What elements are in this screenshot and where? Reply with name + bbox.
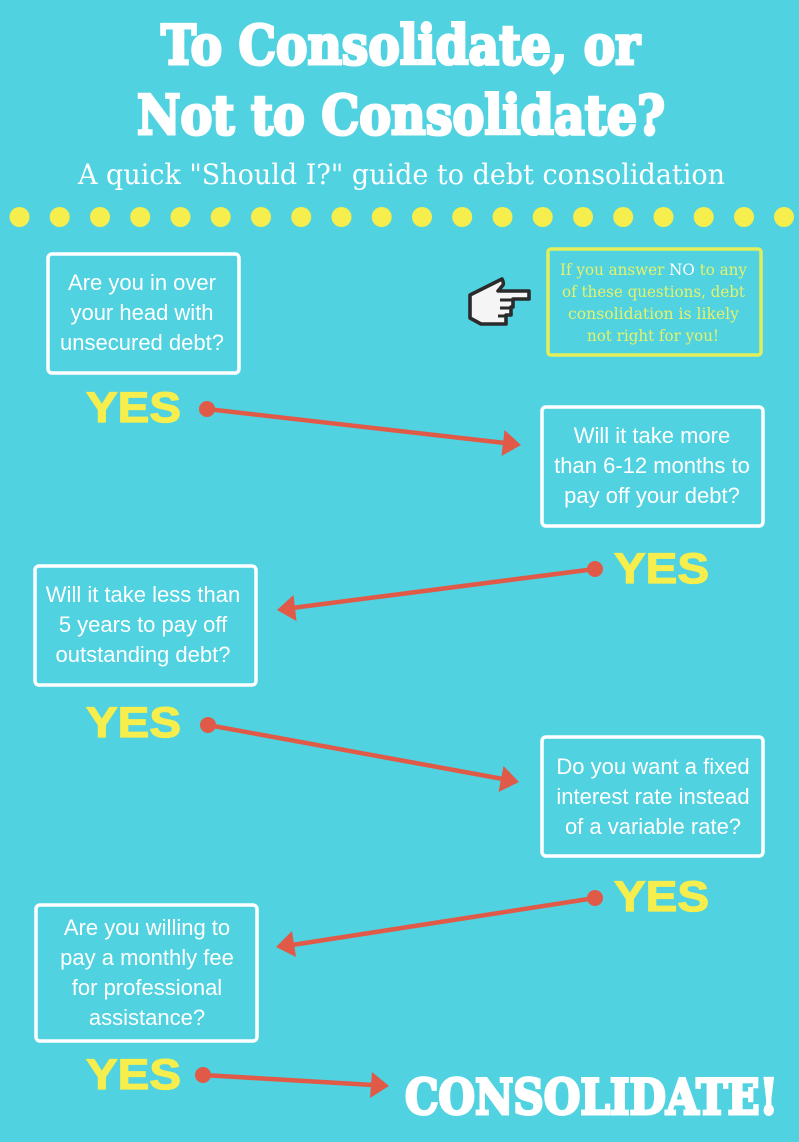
arrow 4: [276, 890, 603, 957]
title: [137, 13, 665, 147]
question box 2: than 6-12 months to: [554, 453, 750, 478]
title: To Consolidate, or: [161, 13, 640, 77]
yes label 5: YES: [86, 1051, 181, 1099]
question box 2: [542, 407, 763, 526]
question box 1: Are you in over: [68, 270, 216, 295]
subtitle: A quick "Should I?" guide to debt consolidation: [77, 158, 725, 191]
yes label 3: YES: [86, 699, 181, 747]
question box 4: Do you want a fixed: [556, 754, 750, 779]
callout: answer no: consolidation is likely: [568, 305, 739, 323]
question box 5: assistance?: [89, 1005, 205, 1030]
question box 2: Will it take more: [574, 423, 730, 448]
question box 3: outstanding debt?: [56, 642, 230, 667]
title: Not to Consolidate?: [137, 83, 665, 147]
question box 1: unsecured debt?: [60, 330, 224, 355]
callout: answer no: [548, 249, 761, 355]
arrow 3: [200, 717, 519, 792]
question box 4: interest rate instead: [556, 784, 750, 809]
yes label 4: YES: [614, 873, 709, 921]
dotted divider: [10, 207, 794, 227]
question box 4: of a variable rate?: [565, 814, 741, 839]
question box 5: for professional: [72, 975, 222, 1000]
callout: answer no: not right for you!: [587, 327, 719, 345]
question box 1: [48, 254, 239, 373]
question box 3: [35, 566, 256, 685]
callout: answer no: If you answer NO to any: [560, 261, 747, 279]
yes label 2: YES: [614, 545, 709, 593]
question box 3: Will it take less than: [46, 582, 240, 607]
icon: pointing hand: [470, 279, 529, 324]
yes label 1: YES: [86, 384, 181, 432]
question box 4: [542, 737, 763, 856]
question box 5: Are you willing to: [64, 915, 230, 940]
question box 2: pay off your debt?: [564, 483, 740, 508]
question box 5: pay a monthly fee: [60, 945, 234, 970]
question box 5: [36, 905, 257, 1041]
question box 3: 5 years to pay off: [59, 612, 228, 637]
arrow 1: [199, 401, 521, 456]
arrow 5: [195, 1067, 389, 1098]
callout: answer no: of these questions, debt: [562, 283, 746, 301]
question box 1: your head with: [70, 300, 214, 325]
arrow 2: [277, 561, 603, 621]
